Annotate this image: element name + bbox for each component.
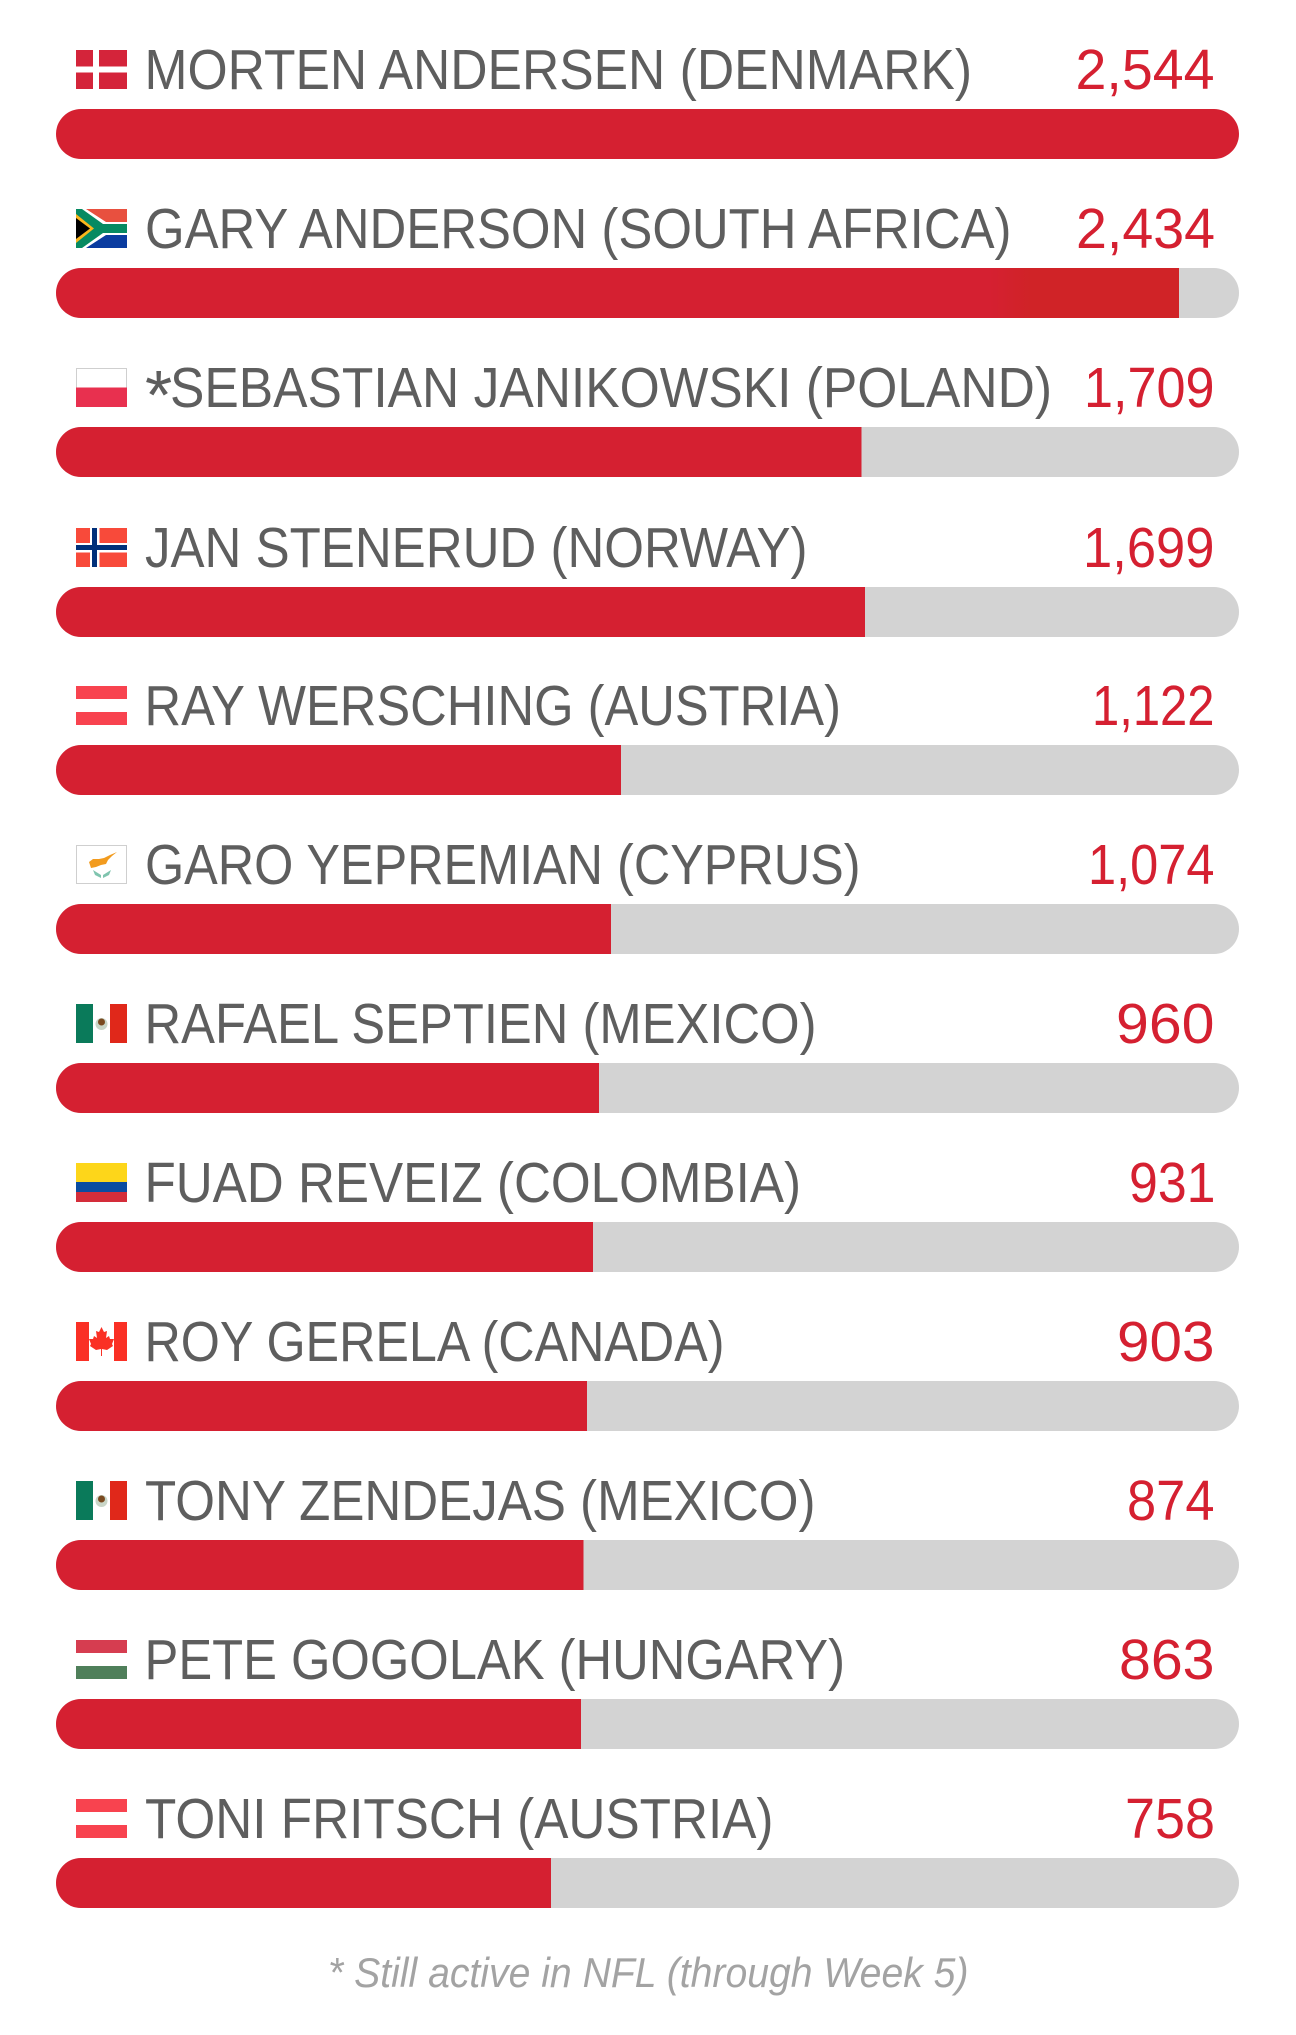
points value: 1,074	[1088, 834, 1214, 897]
points value: 2,434	[1076, 198, 1215, 261]
bar fill	[56, 268, 1179, 318]
footnote: * Still active in NFL (through Week 5)	[328, 1949, 968, 1996]
points value: 1,122	[1092, 675, 1214, 738]
icon: flag of Denmark	[76, 50, 127, 89]
icon: flag of Norway	[76, 528, 127, 567]
player name: RAY WERSCHING (AUSTRIA)	[144, 675, 841, 738]
bar track	[56, 1222, 1239, 1272]
bar fill	[56, 1540, 584, 1590]
icon: flag of Canada	[76, 1322, 127, 1361]
row: Morten Andersen	[56, 39, 1239, 159]
bar track	[56, 1063, 1239, 1113]
icon: flag of Hungary	[76, 1640, 127, 1679]
bar fill	[56, 745, 621, 795]
bar fill	[56, 1222, 593, 1272]
bar track	[56, 745, 1239, 795]
bar track	[56, 1381, 1239, 1431]
bar track	[56, 587, 1239, 637]
points value: 960	[1116, 993, 1214, 1056]
icon: flag of Poland	[76, 368, 127, 407]
bar fill	[56, 1381, 587, 1431]
player name: GARY ANDERSON (SOUTH AFRICA)	[145, 198, 1012, 261]
row: Toni Fritsch	[56, 1788, 1239, 1908]
player name: TONY ZENDEJAS (MEXICO)	[145, 1470, 816, 1533]
icon: flag of Mexico	[76, 1004, 127, 1043]
bar fill	[56, 1063, 599, 1113]
bar track	[56, 427, 1239, 477]
bar fill	[56, 1699, 581, 1749]
points value: 931	[1129, 1152, 1216, 1215]
player name: ROY GERELA (CANADA)	[144, 1311, 724, 1374]
row: Sebastian Janikowski	[56, 356, 1239, 477]
row: Garo Yepremian	[56, 834, 1239, 954]
bar track	[56, 268, 1239, 318]
bar track	[56, 1699, 1239, 1749]
bar fill	[56, 427, 862, 477]
icon: flag of South Africa	[76, 209, 127, 248]
player name: TONI FRITSCH (AUSTRIA)	[145, 1788, 774, 1851]
points value: 863	[1119, 1629, 1214, 1692]
bar track	[56, 1540, 1239, 1590]
player name: RAFAEL SEPTIEN (MEXICO)	[144, 993, 816, 1056]
bar track	[56, 1858, 1239, 1908]
player name: MORTEN ANDERSEN (DENMARK)	[144, 39, 972, 102]
row: Pete Gogolak	[56, 1629, 1239, 1749]
bar	[56, 109, 1239, 159]
row: Rafael Septien	[56, 993, 1239, 1113]
icon: flag of Austria	[76, 686, 127, 725]
icon: flag of Austria	[76, 1799, 127, 1838]
points value: 903	[1117, 1311, 1214, 1374]
points value: 1,709	[1084, 357, 1214, 420]
row: Gary Anderson	[56, 198, 1239, 318]
row: Ray Wersching	[56, 675, 1239, 795]
row: Jan Stenerud	[56, 517, 1239, 637]
player name: JAN STENERUD (NORWAY)	[145, 517, 808, 580]
row: Fuad Reveiz	[56, 1152, 1239, 1272]
bar fill	[56, 1858, 551, 1908]
player name: FUAD REVEIZ (COLOMBIA)	[144, 1152, 801, 1215]
points value: 1,699	[1083, 517, 1214, 580]
player name: PETE GOGOLAK (HUNGARY)	[144, 1629, 845, 1692]
points value: 758	[1125, 1788, 1215, 1851]
icon: flag of Mexico	[76, 1481, 127, 1520]
row: Tony Zendejas	[56, 1470, 1239, 1590]
points value: 2,544	[1076, 39, 1214, 102]
player name: *	[145, 356, 172, 434]
player name: GARO YEPREMIAN (CYPRUS)	[145, 834, 860, 897]
bar fill	[56, 587, 865, 637]
bar fill	[56, 904, 611, 954]
row: Roy Gerela	[56, 1311, 1239, 1431]
bar track	[56, 904, 1239, 954]
icon: flag of Cyprus	[76, 846, 126, 884]
icon: flag of Colombia	[76, 1163, 127, 1202]
points value: 874	[1127, 1470, 1214, 1533]
player name: SEBASTIAN JANIKOWSKI (POLAND)	[170, 357, 1052, 420]
